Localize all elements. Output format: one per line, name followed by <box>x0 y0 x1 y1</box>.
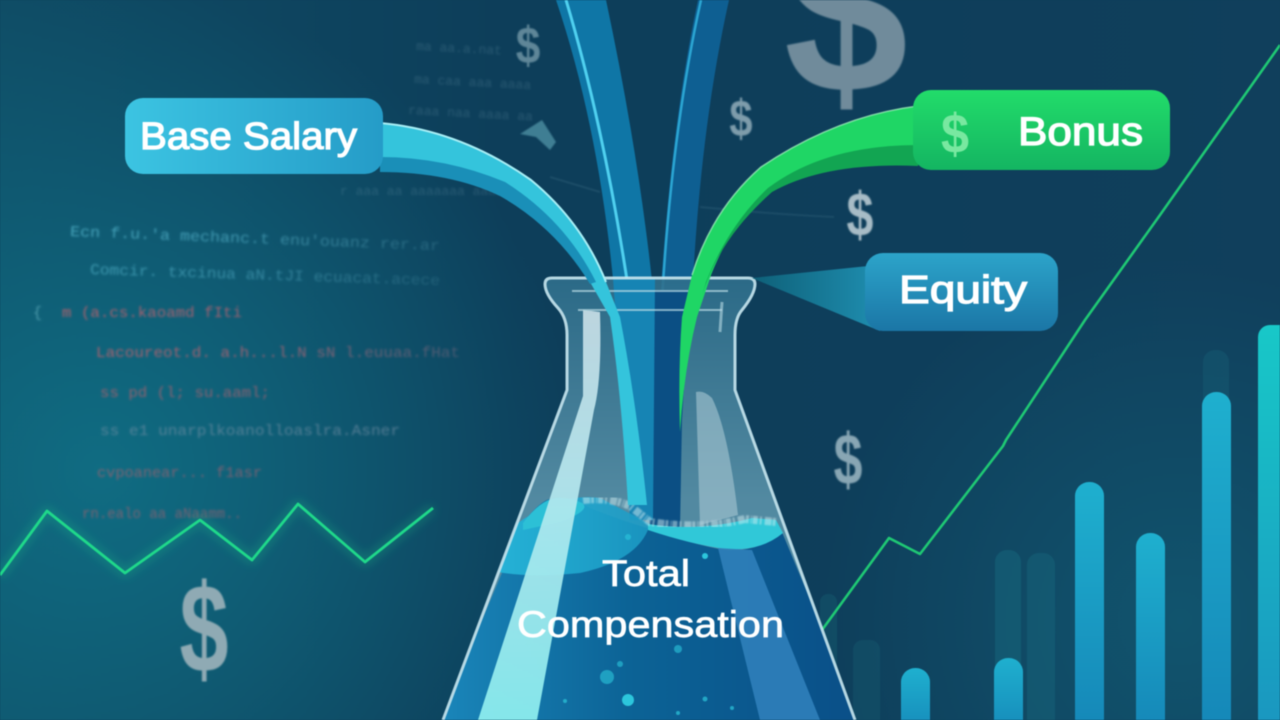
foam <box>583 499 776 525</box>
left side glass highlight streak <box>478 310 600 720</box>
big dollar lower left: $ <box>179 560 229 700</box>
dollar near equity: $ <box>847 180 874 249</box>
dollar near bonus ribbon: $ <box>729 89 753 147</box>
label: Equity <box>865 253 1058 331</box>
faint code text: top centre: r aaa aa aaaaaaa aaaaa <box>340 184 512 199</box>
ribbon: base salary stream <box>380 123 647 505</box>
streams: centre blue ribbons behind flask <box>556 0 729 300</box>
faint code text: left panel: ss e1 unarplkoanolloaslra.Asner <box>100 423 400 440</box>
faint code text: top centre <box>340 39 533 199</box>
ribbon: equity beam <box>752 266 880 331</box>
faint code text: left panel: { <box>33 305 42 322</box>
label: Total Compensation: Compensation <box>517 604 784 645</box>
liquid body <box>440 498 860 720</box>
bubbles <box>563 534 734 715</box>
label: Equity: Equity <box>899 269 1028 312</box>
ribbon: bonus stream <box>679 106 918 432</box>
central dark column <box>649 290 688 528</box>
liquid surface <box>523 498 584 530</box>
bar chart <box>820 325 1280 720</box>
faint code text: left panel: m (a.cs.kaoamd fIti <box>62 305 242 322</box>
faint code text: left panel: Ecn f.u.'a mechanc.t enu'ouanz rer.ar <box>70 224 440 255</box>
dollar signs <box>179 0 908 700</box>
faint code text: left panel: cvpoanear... f1asr <box>97 465 262 482</box>
label: Base Salary: Base Salary <box>140 116 357 158</box>
faint code text: top centre: raaa naa aaaa aa <box>408 103 533 125</box>
right side glass highlight <box>696 392 738 525</box>
faint code text: top centre: ma aa.a.nat <box>416 39 502 58</box>
icon: faded arrow shape <box>520 120 556 150</box>
label: Base Salary <box>125 98 383 174</box>
dollar: $ <box>516 17 540 75</box>
faint code text: left panel: rn.ealo aa aNaamm.. <box>82 506 242 523</box>
faint code text: left panel <box>33 224 460 523</box>
right streak in liquid <box>718 548 820 720</box>
flask outline <box>443 278 855 720</box>
label: Bonus: Bonus <box>1018 110 1143 154</box>
pale bulge under surface <box>498 497 650 575</box>
faint code text: left panel: ss pd (l; su.aaml; <box>100 385 270 402</box>
faint code text: left panel: Comcir. txcinua aN.tJI ecuacat.acece <box>90 262 440 290</box>
faint code text: left panel: Lacoureot.d. a.h...l.N sN l.euuaa.fHat <box>96 345 460 362</box>
neck inner rings <box>572 291 728 310</box>
dollar right of flask: $ <box>834 420 862 500</box>
faint diagonal strokes <box>550 177 834 217</box>
icon: dollar on bonus label: $ <box>941 104 969 166</box>
label: Total Compensation <box>517 553 784 645</box>
line chart: rising green line <box>822 45 1280 630</box>
label: Bonus <box>913 90 1170 170</box>
line chart: left green zigzag <box>0 504 433 575</box>
faint code text: top centre: ma caa aaa aaaa <box>414 72 532 93</box>
glass flask <box>440 278 860 720</box>
label: Total Compensation: Total <box>602 553 690 594</box>
